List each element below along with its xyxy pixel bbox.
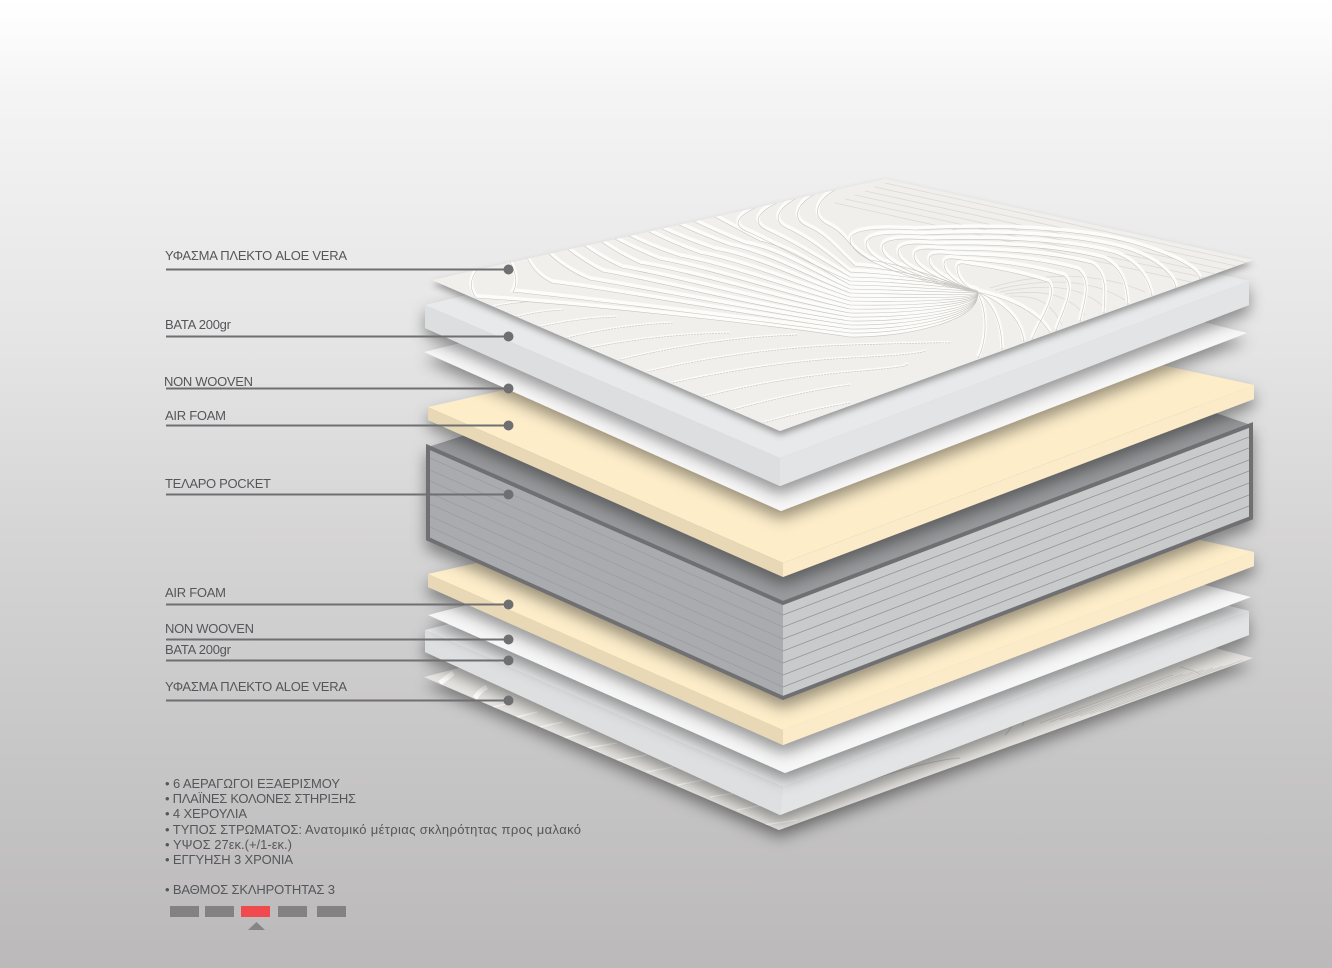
- layer labels: ΒΑΤΑ 200gr: [165, 642, 232, 657]
- layer: upper bata: [425, 195, 1249, 486]
- frame right face: [783, 425, 1251, 698]
- layer labels: NON WOOVEN: [164, 374, 253, 389]
- features list: • ΥΨΟΣ 27εκ.(+/1-εκ.): [165, 837, 292, 852]
- bata left side: [425, 630, 783, 815]
- frame left face: [428, 447, 783, 698]
- features list: • 6 ΑΕΡΑΓΩΓΟΙ ΕΞΑΕΡΙΣΜΟΥ: [165, 776, 340, 791]
- layer: lower bata: [425, 515, 1249, 815]
- layer: upper non woven: [424, 240, 1247, 511]
- frame top surface: [428, 300, 1251, 603]
- layer labels: ΥΦΑΣΜΑ ΠΛΕΚΤΟ ALOE VERA: [165, 248, 347, 263]
- firmness scale: [170, 906, 346, 930]
- layer labels: ΤΕΛΑΡΟ POCKET: [165, 476, 271, 491]
- layer: upper air foam: [428, 305, 1254, 577]
- layer labels: NON WOOVEN: [165, 621, 254, 636]
- features list: • ΠΛΑΪΝΕΣ ΚΟΛΟΝΕΣ ΣΤΗΡΙΞΗΣ: [165, 791, 356, 806]
- layer labels: AIR FOAM: [165, 408, 226, 423]
- bata right side: [780, 611, 1249, 815]
- bata top surface: [425, 515, 1249, 787]
- layer: lower non woven: [428, 500, 1251, 773]
- layer: bottom fabric: [424, 648, 1252, 845]
- layer: pocket spring frame: [428, 300, 1251, 698]
- features list: Ανατομικό μέτριας σκληρότητας προς μαλακό: [305, 822, 581, 837]
- layer labels: AIR FOAM: [165, 585, 226, 600]
- features list: • ΕΓΓΥΗΣΗ 3 ΧΡΟΝΙΑ: [165, 852, 293, 867]
- spring lines left: [430, 458, 783, 687]
- layer: lower air foam: [428, 470, 1254, 745]
- quilted wave pattern: [471, 183, 1253, 423]
- scale pointer: [248, 922, 265, 930]
- features list: • ΤΥΠΟΣ ΣΤΡΩΜΑΤΟΣ:: [165, 822, 302, 837]
- firmness heading: • ΒΑΘΜΟΣ ΣΚΛΗΡΟΤΗΤΑΣ 3: [165, 882, 335, 897]
- frame outline: [428, 425, 1251, 698]
- features list: • 4 ΧΕΡΟΥΛΙΑ: [165, 806, 247, 821]
- layer labels: ΒΑΤΑ 200gr: [165, 317, 232, 332]
- features list: [165, 776, 581, 867]
- layer labels: [164, 248, 347, 694]
- layer labels: ΥΦΑΣΜΑ ΠΛΕΚΤΟ ALOE VERA: [165, 679, 347, 694]
- spring lines right: [783, 437, 1249, 687]
- layer: top fabric: [432, 179, 1253, 431]
- leader lines and dots: [166, 264, 514, 706]
